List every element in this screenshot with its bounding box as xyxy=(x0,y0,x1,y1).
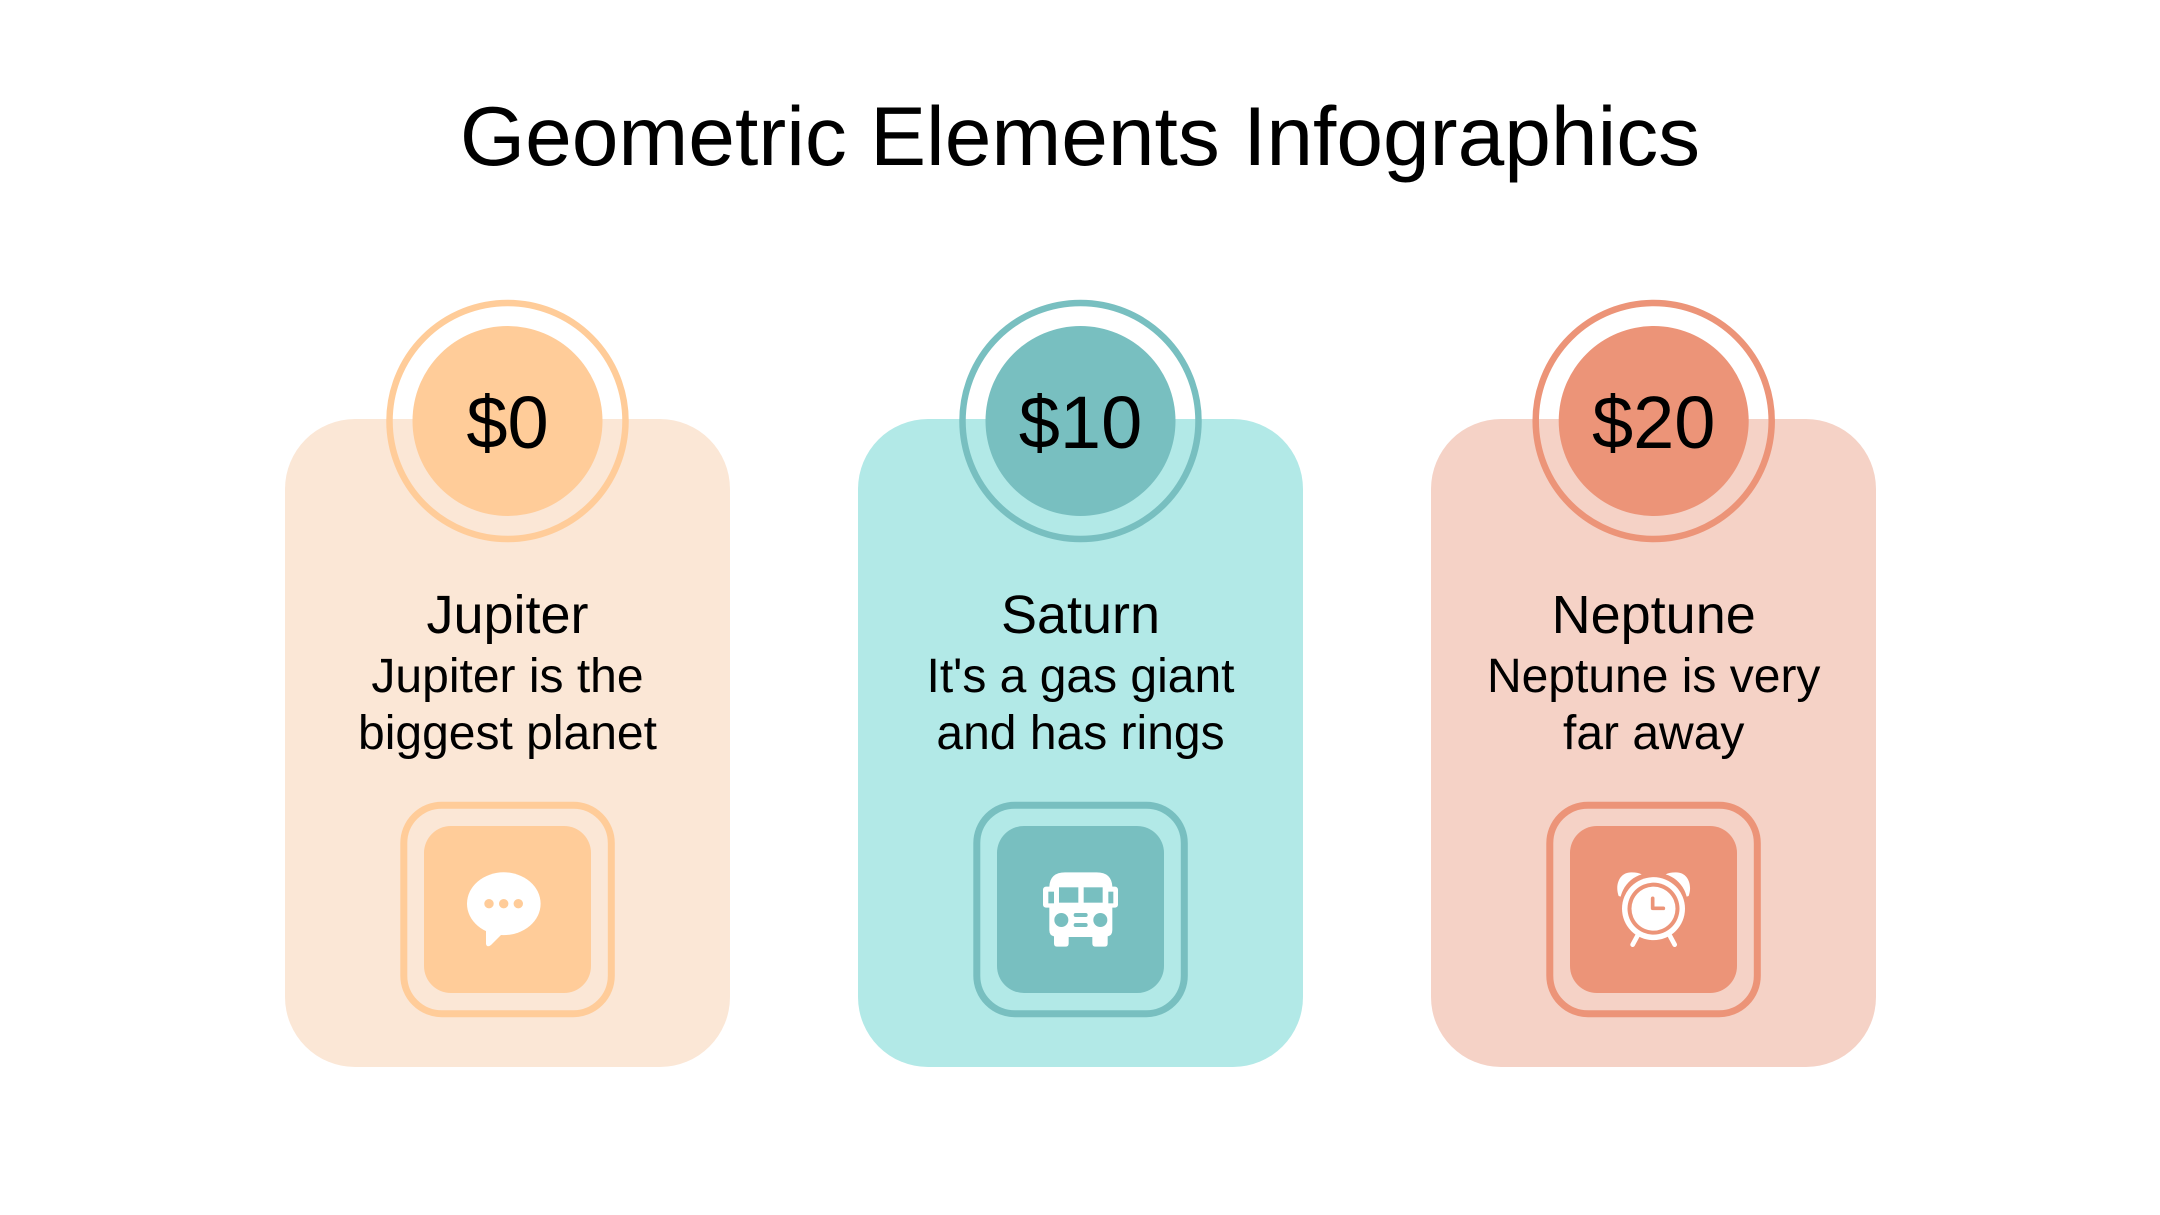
text block: Neptune description: Neptune is very xyxy=(1487,650,1820,703)
icon frame: speech bubble xyxy=(404,805,611,1014)
text block: Neptune description: far away xyxy=(1563,707,1744,760)
icon frame: bus xyxy=(977,805,1184,1014)
panel: Jupiter background xyxy=(285,419,730,1067)
price badge: $10 xyxy=(962,303,1198,539)
icon: school bus xyxy=(1043,872,1118,947)
card: Jupiter xyxy=(285,303,730,1067)
heading: Saturn: Saturn xyxy=(1001,585,1160,645)
title: Geometric Elements Infographics xyxy=(460,89,1700,183)
price badge: $0: $0 xyxy=(466,381,549,464)
text block: Jupiter description: biggest planet xyxy=(358,707,657,760)
icon: alarm clock xyxy=(1617,872,1690,945)
price badge: $10: $10 xyxy=(1019,381,1142,464)
price badge: $20 xyxy=(1536,303,1772,539)
text block: Saturn description: and has rings xyxy=(936,707,1225,760)
card: Neptune xyxy=(1431,303,1876,1067)
icon frame: alarm clock xyxy=(1550,805,1757,1014)
text block: Saturn description: It's a gas giant xyxy=(926,650,1235,703)
heading: Neptune: Neptune xyxy=(1552,585,1756,645)
panel: Neptune background xyxy=(1431,419,1876,1067)
panel: Saturn background xyxy=(858,419,1303,1067)
heading: Jupiter: Jupiter xyxy=(426,585,589,645)
text block: Jupiter description: Jupiter is the xyxy=(371,650,644,703)
icon: speech bubble xyxy=(467,872,541,946)
price badge: $20: $20 xyxy=(1592,381,1715,464)
price badge: $0 xyxy=(390,303,626,539)
card: Saturn xyxy=(858,303,1303,1067)
